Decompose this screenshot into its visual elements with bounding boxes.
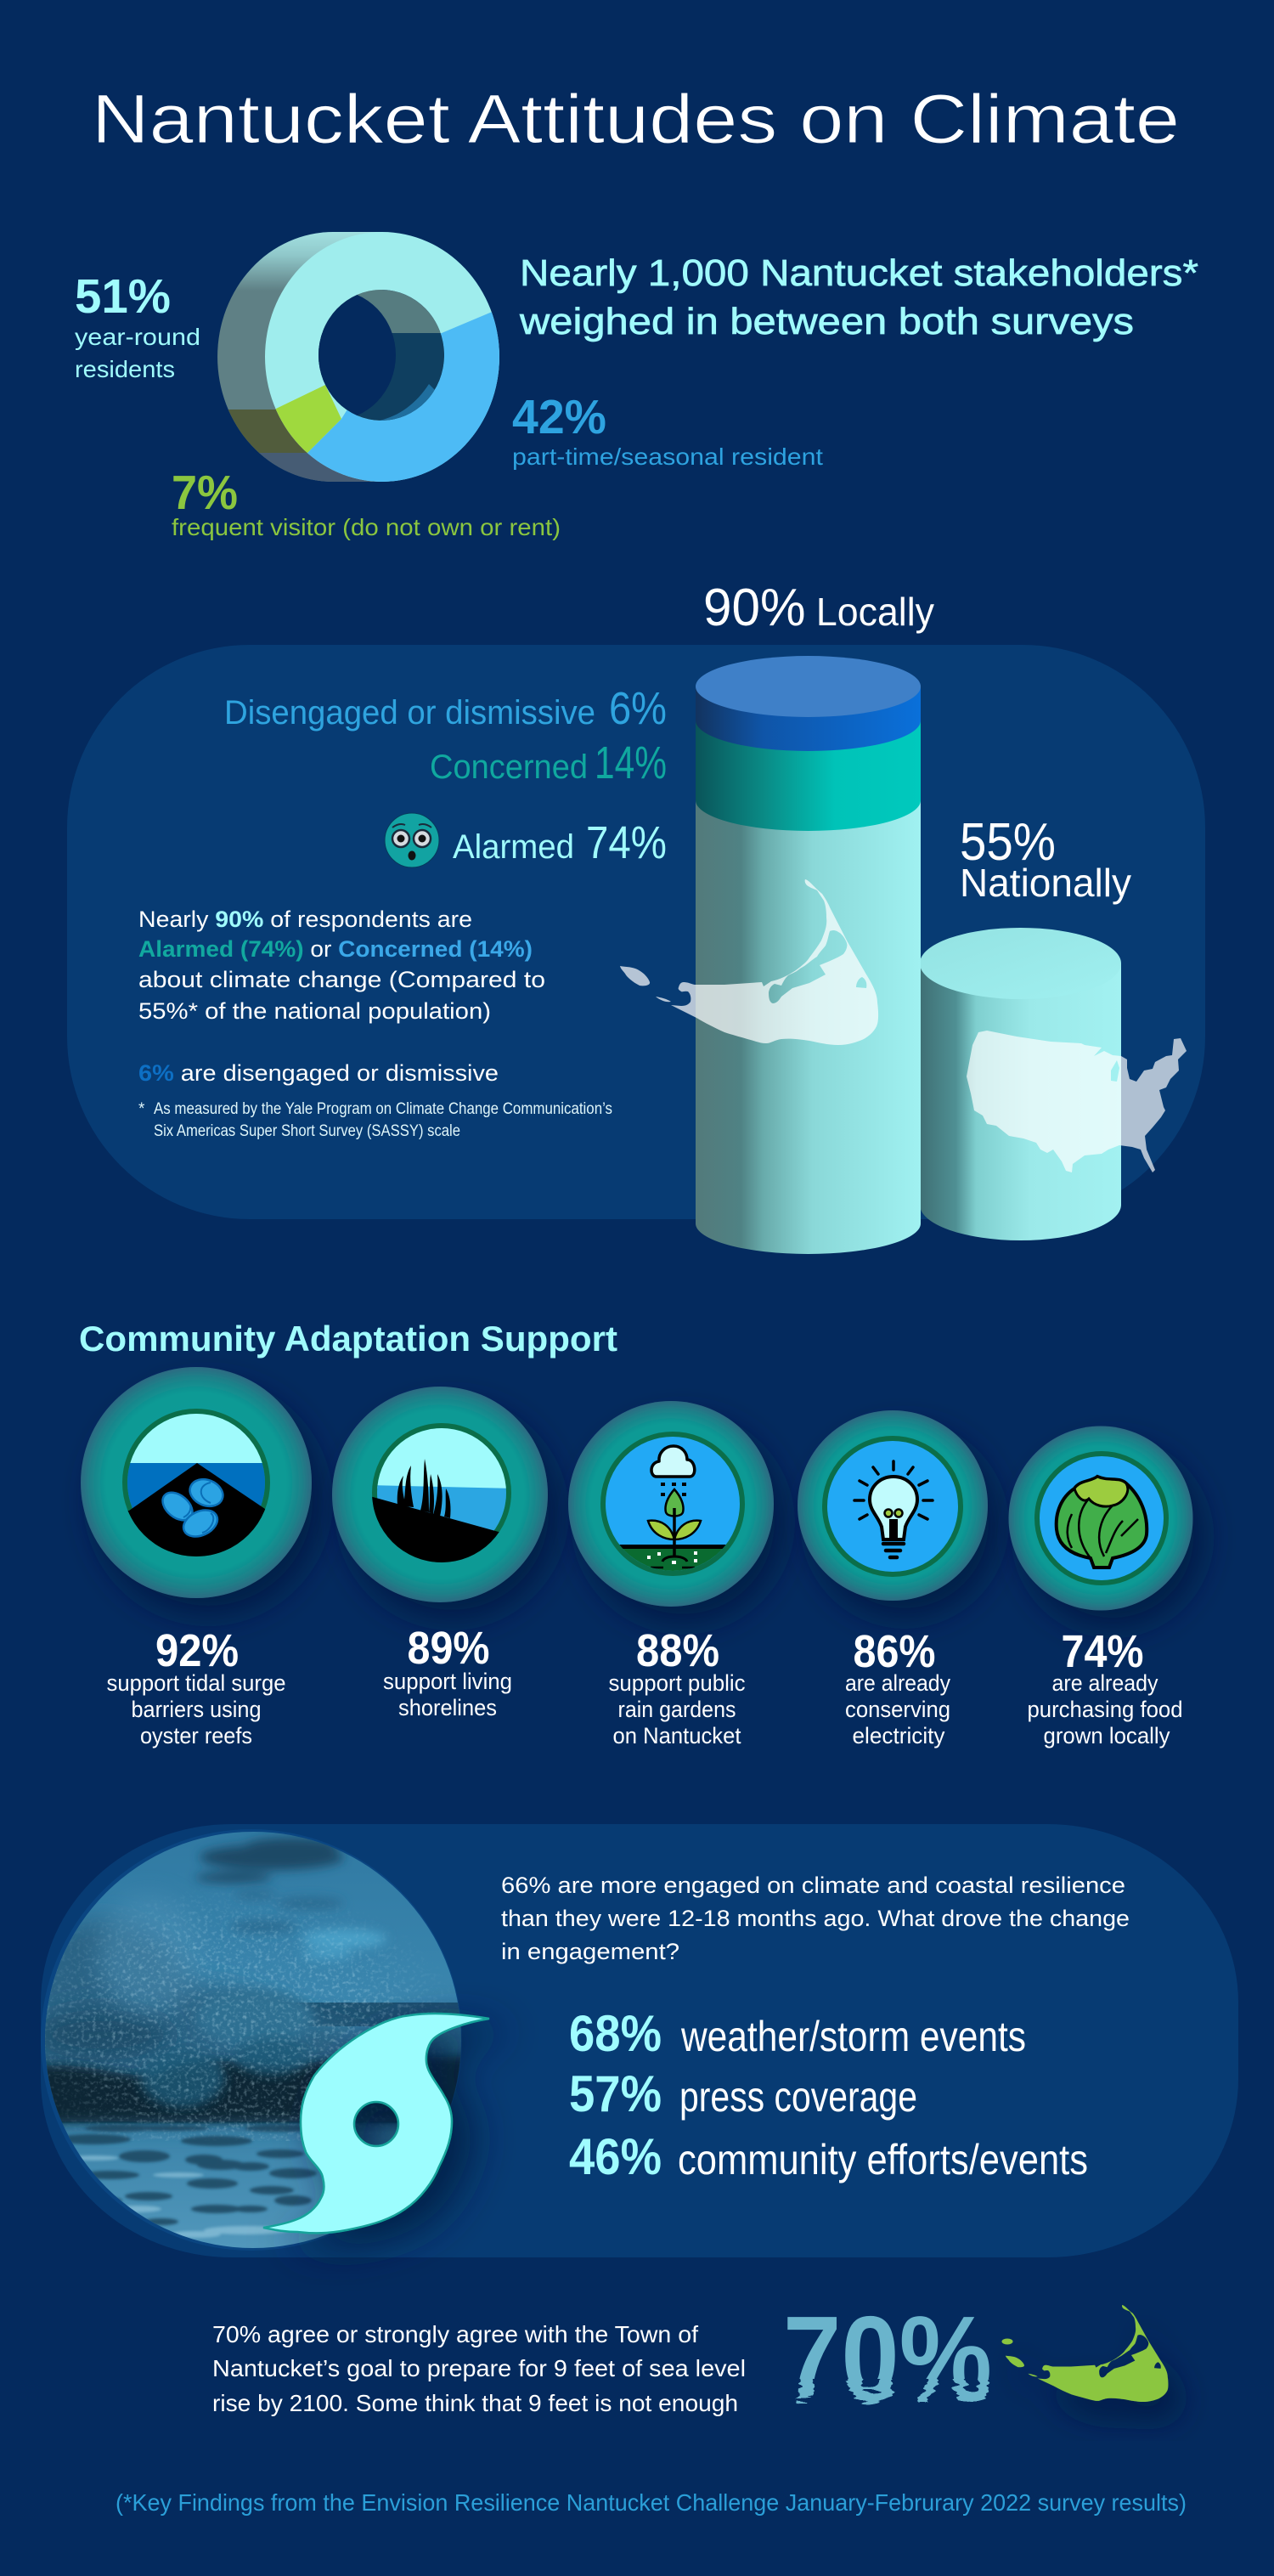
item: tidal surge barriers	[81, 1367, 312, 1748]
caption: conserving electricity	[845, 1670, 950, 1748]
stat: 7% frequent visitor: 7%	[172, 466, 238, 520]
stat: 88%: 88%	[636, 1625, 719, 1676]
panel background	[67, 645, 1205, 1219]
stat: 68% weather/storm events	[569, 2005, 1026, 2062]
item: rain gardens	[568, 1401, 774, 1748]
caption: conserving electricity: electricity	[853, 1723, 945, 1748]
item: locally grown food	[1009, 1426, 1192, 1748]
caption: rain gardens: rain gardens	[618, 1697, 736, 1722]
heading: community adaptation support: Community Adaptation Support	[79, 1319, 617, 1359]
stat: 42% part-time: part-time/seasonal resident	[512, 443, 823, 470]
text block: concern summary: 55%* of the national population)	[138, 998, 491, 1024]
caption: tidal surge: oyster reefs	[140, 1723, 252, 1748]
caption: living shorelines	[383, 1669, 512, 1720]
caption: locally grown: grown locally	[1043, 1723, 1170, 1748]
stat: 57% press coverage: press coverage	[679, 2073, 917, 2121]
stat: 86%: 86%	[853, 1626, 936, 1677]
stat: 51% year-round residents: year-round	[75, 324, 200, 350]
footnote: SASSY scale: As measured by the Yale Program on Climate Change Communication’s	[154, 1100, 612, 1118]
stat: concerned 14%: 14%	[595, 737, 667, 788]
section: sea level goal	[212, 2293, 1168, 2425]
icon: rain garden plant	[568, 1401, 774, 1607]
stat: disengaged or dismissive 6%: Disengaged or dismissive	[224, 694, 595, 732]
title: Nantucket Attitudes on Climate	[92, 81, 1180, 158]
chart: national cylinder 55%	[920, 928, 1121, 1240]
panel background	[41, 1824, 1238, 2257]
stat: 57% press coverage	[569, 2065, 917, 2122]
text block: concern summary: 6% are disengaged or dismissive	[138, 1060, 499, 1086]
map: Nantucket island	[620, 879, 878, 1045]
stat: 42% part-time: 42%	[512, 390, 606, 444]
stat: alarmed 74%	[453, 817, 667, 868]
label: 90% locally: 90% Locally	[703, 579, 934, 637]
label: 55% nationally	[960, 813, 1131, 905]
caption: rain gardens	[608, 1670, 746, 1748]
caption: tidal surge	[107, 1670, 285, 1748]
stat: 46% community efforts/events: 46%	[569, 2128, 662, 2185]
text block: engagement question: than they were 12-18 months ago. What drove the change	[501, 1906, 1130, 1931]
stat: 92%: 92%	[155, 1625, 239, 1676]
caption: tidal surge: support tidal surge	[107, 1670, 285, 1696]
text block: sea level goal: Nantucket’s goal to prepare for 9 feet of sea level	[212, 2355, 746, 2381]
stat: disengaged or dismissive 6%: 6%	[609, 683, 667, 734]
stat: 68% weather/storm events: weather/storm events	[680, 2013, 1026, 2060]
icon: grass shoreline	[332, 1387, 548, 1602]
caption: living shorelines: shorelines	[398, 1695, 497, 1720]
caption: rain gardens: support public	[608, 1670, 746, 1696]
text block: sea level goal: rise by 2100. Some think that 9 feet is not enough	[212, 2390, 738, 2416]
footnote: SASSY scale: Six Americas Super Short Survey (SASSY) scale	[154, 1122, 460, 1140]
stat: 46% community efforts/events	[569, 2128, 1088, 2185]
stat: 51% year-round residents: 51%	[75, 269, 171, 324]
stat: concerned 14%	[430, 737, 667, 788]
stat: 42% part-time	[512, 390, 823, 470]
graphic: flooded 70%: 70%	[783, 2293, 992, 2418]
item: living shorelines	[332, 1387, 548, 1720]
heading: stakeholders	[519, 252, 1198, 342]
icon: light bulb	[798, 1410, 988, 1601]
section: respondent breakdown	[75, 221, 1198, 540]
map: United States	[967, 1031, 1187, 1172]
stat: disengaged or dismissive 6%	[224, 683, 667, 734]
label: 55% nationally: 55%	[960, 813, 1056, 872]
stat: 89%: 89%	[408, 1623, 489, 1674]
label: 55% nationally: Nationally	[960, 861, 1131, 905]
text block: concern summary: Nearly 90% of respondents are	[138, 907, 472, 932]
chart: local cylinder 90%	[696, 656, 921, 1254]
stat: 68% weather/storm events: 68%	[569, 2005, 662, 2062]
stat: 7% frequent visitor: frequent visitor (do not own or rent)	[172, 514, 561, 540]
stat: 51% year-round residents	[75, 269, 200, 382]
caption: locally grown: are already	[1051, 1670, 1158, 1696]
stat: alarmed 74%: Alarmed	[453, 828, 574, 866]
icon: alarmed face	[385, 813, 439, 867]
text block: concern summary	[138, 907, 545, 1086]
item: conserving electricity	[798, 1410, 988, 1748]
caption: tidal surge: barriers using	[131, 1697, 262, 1722]
stat: 7% frequent visitor	[172, 466, 561, 540]
caption: conserving electricity: conserving	[845, 1697, 950, 1722]
stat: 57% press coverage: 57%	[569, 2065, 662, 2122]
map: green Nantucket	[1002, 2305, 1168, 2402]
caption: rain gardens: on Nantucket	[613, 1723, 741, 1748]
heading: stakeholders: Nearly 1,000 Nantucket stakeholders*	[520, 252, 1198, 294]
caption: living shorelines: support living	[383, 1669, 512, 1694]
caption: locally grown	[1028, 1670, 1182, 1748]
heading: stakeholders: weighed in between both surveys	[519, 301, 1134, 342]
text block: engagement question: in engagement?	[501, 1939, 679, 1964]
text block: engagement question	[501, 1873, 1130, 1964]
caption: locally grown: purchasing food	[1028, 1697, 1182, 1722]
stat: concerned 14%: Concerned	[430, 749, 588, 786]
chart: 3D donut of respondent types	[217, 232, 499, 482]
text block: sea level goal	[212, 2321, 746, 2416]
text block: sea level goal: 70% agree or strongly agree with the Town of	[212, 2321, 698, 2347]
panel: engagement drivers	[34, 1824, 1238, 2257]
icon: oyster reef	[81, 1367, 312, 1598]
text block: engagement question: 66% are more engaged on climate and coastal resilience	[501, 1873, 1125, 1898]
text block: concern summary: Alarmed (74%) or Concerned (14%)	[138, 936, 533, 962]
stat: 74%: 74%	[1062, 1626, 1143, 1677]
text block: concern summary: about climate change (Compared to	[138, 967, 545, 992]
icon: hurricane symbol	[263, 2014, 489, 2233]
graphic: flooded 70%	[787, 2316, 990, 2404]
photo: crashing wave	[34, 1827, 467, 2251]
caption: conserving electricity: are already	[845, 1670, 950, 1696]
footnote: SASSY scale	[138, 1100, 612, 1140]
stat: 46% community efforts/events: community efforts/events	[678, 2136, 1088, 2183]
stat: alarmed 74%: 74%	[586, 817, 667, 868]
panel: climate concern	[67, 579, 1205, 1254]
footer: source note: (*Key Findings from the Envision Resilience Nantucket Challenge January-Februrary 2022 survey results)	[116, 2489, 1187, 2516]
graphic: flooded 70%: 70%	[783, 2300, 992, 2425]
footnote: SASSY scale: *	[138, 1100, 145, 1118]
stat: 51% year-round residents: residents	[75, 356, 175, 382]
icon: cabbage	[1009, 1426, 1192, 1611]
